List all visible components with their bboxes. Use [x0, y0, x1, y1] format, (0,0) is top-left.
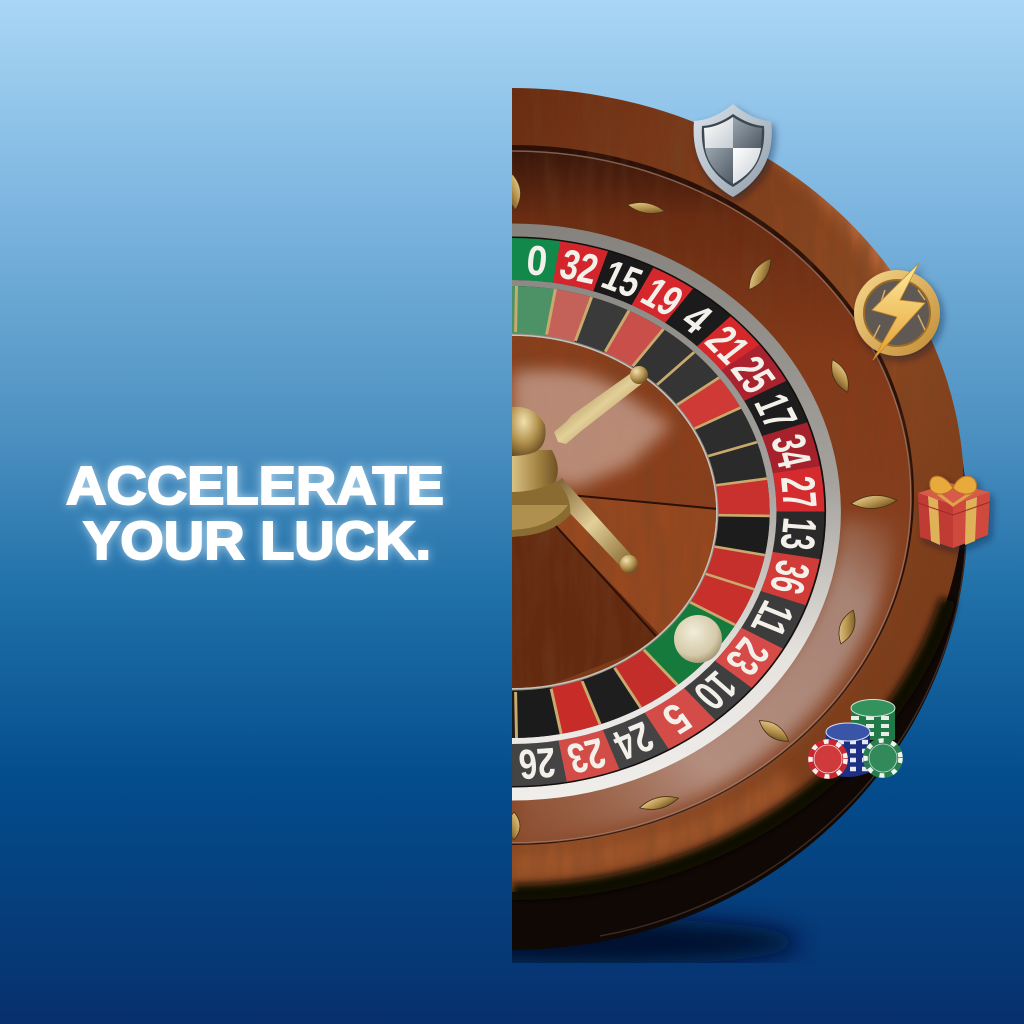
numbers: 11 [741, 594, 805, 643]
number band [512, 238, 824, 786]
icon: casino chips [808, 700, 903, 779]
ball [674, 615, 722, 663]
wooden outer rim [512, 80, 972, 900]
icon: shield [694, 104, 772, 197]
numbers: 36 [759, 556, 821, 599]
numbers: 10 [683, 662, 748, 719]
floor shadow [512, 906, 809, 963]
wheel dark base [512, 460, 966, 950]
blue chip stack [826, 723, 870, 777]
numbers: 5 [653, 694, 701, 743]
title: YOUR LUCK. [83, 511, 431, 571]
turret collar [512, 450, 558, 492]
rim lower shadow [512, 600, 948, 892]
cone wedge: right [557, 497, 716, 634]
numbers: 0 [524, 236, 550, 285]
outer silver ring [512, 224, 841, 800]
numbers: 21 [695, 317, 760, 372]
gold turret hub [512, 366, 648, 573]
roulette rings [512, 224, 841, 800]
turret knob [512, 407, 546, 456]
numbers: 17 [744, 387, 808, 435]
icon: lightning coin [854, 263, 940, 360]
center cone [512, 334, 718, 690]
diamond deflectors [506, 174, 897, 840]
numbers: 23 [562, 729, 611, 783]
numbers [517, 236, 827, 789]
numbers: 27 [770, 474, 827, 510]
numbers: 25 [721, 348, 786, 401]
green chip [863, 738, 903, 778]
numbers: 13 [770, 516, 827, 552]
numbers: 15 [595, 251, 649, 307]
cone glare [512, 370, 672, 488]
title: ACCELERATE [66, 456, 444, 516]
red chip [808, 739, 848, 779]
numbers: 23 [715, 630, 780, 684]
numbers: 19 [633, 268, 692, 325]
lower spoke [558, 478, 632, 566]
wedge lines [570, 495, 718, 509]
wooden bowl [512, 152, 911, 843]
roulette wheel half [512, 88, 966, 950]
upper spoke [554, 371, 644, 444]
icon: gift box [918, 476, 990, 548]
numbers: 4 [672, 295, 722, 343]
numbers: 26 [517, 738, 558, 789]
green chip stack [851, 700, 895, 740]
cone wedge: top [512, 330, 725, 510]
turret base [512, 480, 570, 537]
cone wedge: lower-left [512, 526, 659, 688]
pockets [512, 286, 770, 738]
numbers: 34 [761, 430, 822, 472]
rim inner edge [512, 145, 914, 845]
bowl gloss [520, 520, 868, 812]
numbers: 32 [555, 240, 603, 293]
numbers: 24 [606, 712, 662, 769]
pocket dividers [516, 286, 770, 738]
title [66, 456, 444, 571]
inner silver ring [512, 280, 776, 744]
